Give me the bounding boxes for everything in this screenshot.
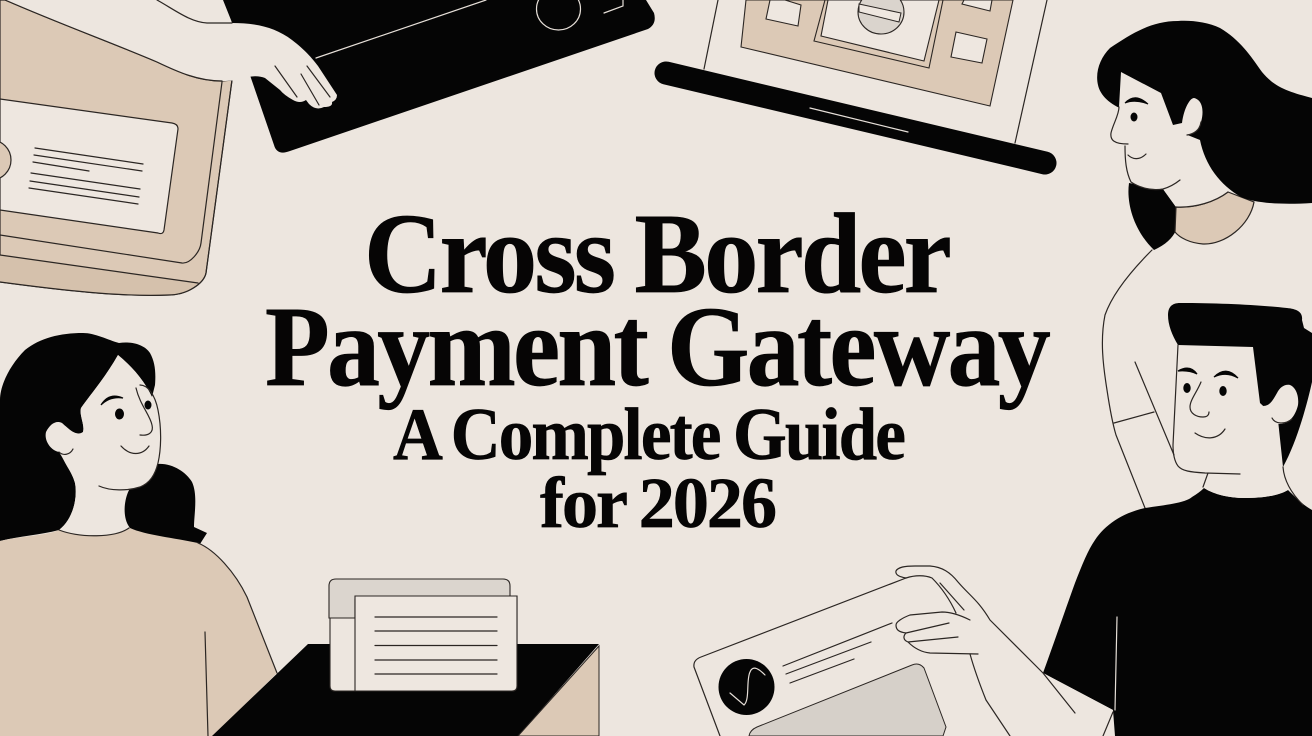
card logo bbox=[718, 659, 774, 715]
illustration: woman top right bbox=[1097, 21, 1312, 508]
illustration: man bottom right bbox=[694, 303, 1312, 736]
address label bbox=[0, 99, 178, 234]
illustration: woman bottom left bbox=[0, 333, 277, 736]
back hair bbox=[1128, 183, 1176, 250]
collar bbox=[1175, 192, 1254, 244]
title bbox=[265, 190, 1050, 543]
title line: Cross Border: Cross Border bbox=[364, 190, 950, 317]
laptop screen panel bbox=[741, 0, 1013, 106]
subtitle line: A Complete Guide: A Complete Guide bbox=[393, 394, 904, 476]
document folder bbox=[329, 579, 517, 691]
hair bbox=[0, 333, 155, 541]
arm and hand bbox=[896, 566, 1113, 736]
face and neck bbox=[46, 355, 160, 535]
illustration: black tablet bbox=[223, 0, 655, 153]
main hair bbox=[1097, 21, 1312, 204]
card image panel bbox=[749, 664, 946, 736]
illustration: desk with documents bbox=[212, 579, 599, 736]
sweater bbox=[0, 528, 277, 736]
illustration: parcel with address label bbox=[0, 0, 232, 295]
laptop base bbox=[666, 73, 1045, 163]
illustration: laptop bbox=[666, 0, 1047, 163]
illustration: hand reaching over tablet bbox=[5, 0, 337, 108]
back hair bbox=[124, 464, 207, 545]
payment card held in hand bbox=[694, 577, 1010, 736]
face bbox=[1111, 72, 1228, 207]
subtitle line: for 2026: for 2026 bbox=[540, 463, 775, 543]
sweater bbox=[1043, 488, 1312, 736]
title line: Payment Gateway: Payment Gateway bbox=[265, 283, 1050, 410]
body outline bbox=[1102, 250, 1152, 508]
head bbox=[1168, 303, 1312, 505]
